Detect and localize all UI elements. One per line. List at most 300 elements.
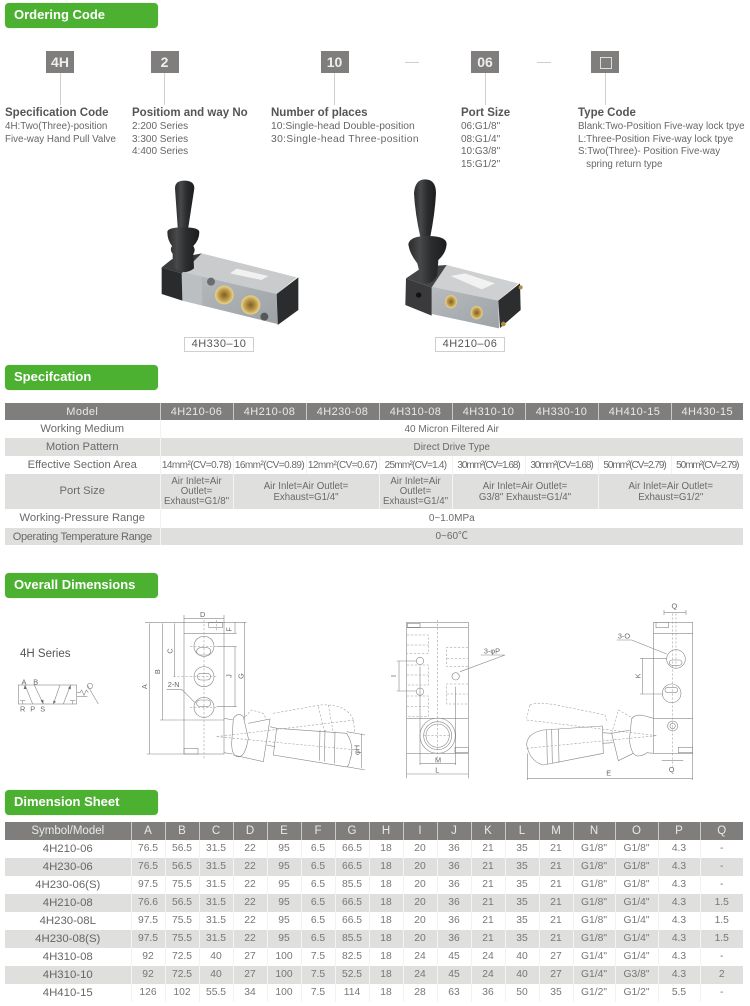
dimension table: 27	[244, 951, 256, 962]
photo: valve 4H330-10	[162, 181, 298, 325]
dimension table: 22	[244, 861, 256, 872]
drawing: side view	[389, 620, 505, 778]
dimension table: 102	[173, 987, 191, 998]
dimension table: 66.5	[342, 861, 362, 872]
photo: valve 4H210-06	[405, 179, 523, 328]
dimension table: M	[551, 825, 561, 837]
dimension table: Symbol/Model	[31, 825, 104, 837]
specification table: Exhaust=G1/4"	[383, 496, 448, 507]
dimension table: 4H210-06	[43, 843, 93, 855]
specification table: Port Size	[60, 485, 105, 497]
panel: product photos	[162, 179, 523, 352]
dimension table: -	[720, 843, 723, 854]
dimension table: 92	[142, 951, 154, 962]
code column: specification code: Five-way Hand Pull Valve	[5, 134, 116, 144]
dimension table: 40	[516, 951, 528, 962]
caption: 4H330-10	[184, 337, 254, 352]
drawing: rear view with handle: K	[633, 673, 642, 678]
dimension table: 20	[414, 879, 426, 890]
heading: dimension sheet	[5, 790, 158, 815]
dimension table: 7.5	[311, 987, 325, 998]
code column: type code: spring return type	[586, 158, 662, 170]
code column: port size: 06:G1/8"	[461, 121, 500, 132]
dimension table: 4H230-08L	[40, 915, 96, 927]
drawing: side view: M	[435, 756, 441, 765]
dimension table: 40	[210, 951, 222, 962]
dimension table: 18	[380, 951, 392, 962]
dimension table: 31.5	[206, 843, 226, 854]
dimension table: 21	[550, 861, 562, 872]
dimension table: 4H230-06	[43, 861, 93, 873]
dimension table: 4H210-08	[43, 897, 93, 909]
pneumatic symbol: B	[33, 677, 38, 686]
drawing: front view with handle: A	[140, 684, 149, 689]
drawing: front view with handle: D	[200, 610, 205, 619]
dimension table: 36	[448, 915, 460, 926]
dimension table: 4.3	[672, 843, 686, 854]
dimension table: 21	[550, 897, 562, 908]
code column: type code	[578, 51, 745, 170]
caption: 4H210-06	[435, 337, 505, 352]
drawing: front view with handle: C	[165, 648, 174, 654]
specification table	[5, 403, 743, 545]
code column: type code: S:Two(Three)- Position Five-way	[578, 146, 720, 157]
dimension table: 4H310-10	[43, 969, 93, 981]
code column: specification code	[5, 51, 116, 144]
dimension table: 21	[482, 915, 494, 926]
dimension table: 100	[275, 951, 293, 962]
drawing: front view with handle: F	[224, 627, 233, 632]
dimension table: 31.5	[206, 861, 226, 872]
dimension table: 6.5	[311, 897, 325, 908]
dimension table: 18	[380, 915, 392, 926]
dimension table: 21	[482, 897, 494, 908]
code column: position and way number	[132, 51, 248, 157]
dimension table: 95	[278, 843, 290, 854]
specification table: G3/8" Exhaust=G1/4"	[479, 492, 571, 503]
specification table: 50mm²(CV=2.79)	[603, 460, 666, 470]
dimension table: 95	[278, 897, 290, 908]
specification table: 4H410-15	[609, 406, 660, 418]
specification table: 40 Micron Filtered Air	[404, 424, 499, 434]
code column: port size: 06	[477, 54, 493, 70]
heading: overall dimensions	[5, 573, 158, 598]
dimension table: 18	[380, 861, 392, 872]
code column: position and way number: Positiom and way No	[132, 107, 248, 119]
code column: position and way number: 2:200 Series	[132, 121, 188, 132]
dimension table: 21	[482, 843, 494, 854]
code column: type code: Blank:Two-Position Five-way lock tpye	[578, 121, 745, 132]
dimension table: 22	[244, 879, 256, 890]
dimension table: 24	[414, 951, 426, 962]
code column: number of places	[271, 51, 419, 144]
dimension table: 7.5	[311, 951, 325, 962]
panel: overall dimensions	[4, 572, 693, 780]
dimension table: 22	[244, 843, 256, 854]
dimension table: 36	[448, 933, 460, 944]
dimension table: 1.5	[715, 933, 729, 944]
drawing: front view with handle: 2-N	[168, 680, 180, 689]
specification table: Effective Section Area	[28, 459, 137, 471]
specification table: 4H310-08	[390, 406, 441, 418]
code column: specification code: 4H:Two(Three)-position	[5, 121, 107, 132]
dimension table: 27	[550, 969, 562, 980]
dimension table: 36	[448, 843, 460, 854]
dimension table: 1.5	[715, 915, 729, 926]
separator dash	[537, 62, 551, 63]
separator dash	[405, 62, 419, 63]
dimension table: 31.5	[206, 897, 226, 908]
dimension table: 18	[380, 879, 392, 890]
specification table: 25mm²(CV=1.4)	[385, 460, 446, 470]
heading: dimension sheet: Dimension Sheet	[14, 794, 119, 809]
dimension table: 21	[550, 915, 562, 926]
drawing: front view with handle: B	[153, 669, 162, 674]
specification table: Exhaust=G1/2"	[638, 492, 703, 503]
specification table: 4H310-10	[463, 406, 514, 418]
code column: number of places: 10:Single-head Double-position	[271, 121, 415, 132]
dimension table: F	[314, 825, 322, 837]
dimension table: K	[484, 825, 492, 837]
specification table: 30mm²(CV=1.68)	[457, 460, 520, 470]
dimension table: 35	[516, 897, 528, 908]
specification table: 4H330-10	[536, 406, 587, 418]
specification table: Exhaust=G1/8"	[164, 496, 229, 507]
dimension table: 21	[482, 861, 494, 872]
dimension table: 40	[516, 969, 528, 980]
drawing: rear view with handle: Q	[669, 765, 675, 774]
dimension table: E	[280, 825, 288, 837]
dimension table: 36	[448, 879, 460, 890]
dimension table: J	[451, 825, 457, 837]
specification table: Exhaust=G1/4"	[273, 492, 339, 503]
dimension table: G1/8"	[581, 933, 607, 944]
heading: specification	[5, 365, 158, 390]
pneumatic symbol	[18, 677, 98, 713]
dimension table: -	[720, 951, 723, 962]
dimension table: 20	[414, 933, 426, 944]
dimension table: 35	[516, 879, 528, 890]
dimension table: 31.5	[206, 915, 226, 926]
specification table: 14mm²(CV=0.78)	[162, 460, 231, 470]
code column: type code: Type Code	[578, 107, 636, 119]
dimension table: 4H410-15	[43, 987, 93, 999]
dimension table: 24	[482, 951, 494, 962]
dimension table: 4.3	[672, 915, 686, 926]
drawing: side view: I	[389, 675, 398, 677]
dimension table: 18	[380, 969, 392, 980]
drawing: front view with handle: G	[236, 673, 245, 679]
dimension table: G1/8"	[581, 897, 607, 908]
code column: number of places: 30:Single-head Three-position	[271, 134, 419, 144]
dimension table: 27	[550, 951, 562, 962]
specification table: Air Inlet=Air Outlet=	[628, 481, 713, 492]
dimension table: G1/4"	[624, 951, 649, 962]
dimension table: 1.5	[715, 897, 729, 908]
specification table: Model	[66, 406, 98, 418]
code column: position and way number: 3:300 Series	[132, 134, 188, 144]
drawing: rear view with handle	[527, 601, 693, 780]
dimension table: 95	[278, 861, 290, 872]
dimension table: G1/8"	[624, 879, 649, 890]
code column: port size	[461, 51, 510, 170]
code column: port size: 10:G3/8"	[461, 146, 500, 157]
dimension table: 63	[448, 987, 460, 998]
dimension table: 22	[244, 933, 256, 944]
dimension table: 56.5	[172, 843, 192, 854]
dimension table: 85.5	[342, 933, 362, 944]
dimension table: 21	[550, 933, 562, 944]
dimension table: 21	[550, 843, 562, 854]
dimension table: O	[632, 825, 641, 837]
dimension table: G1/4"	[581, 951, 607, 962]
specification table: Working-Pressure Range	[20, 512, 145, 524]
code column: number of places: 10	[327, 54, 342, 70]
dimension table: G1/8"	[581, 879, 607, 890]
dimension table: 85.5	[342, 879, 362, 890]
dimension table: 18	[380, 987, 392, 998]
drawing: front view with handle: J	[225, 674, 234, 678]
dimension table: D	[246, 825, 254, 837]
dimension table: 18	[380, 933, 392, 944]
dimension table: 35	[516, 915, 528, 926]
dimension table: G1/4"	[624, 915, 649, 926]
dimension table: 4.3	[672, 969, 686, 980]
specification table: Air Inlet=Air Outlet=	[264, 481, 348, 492]
code column: position and way number: 2	[161, 54, 168, 70]
dimension table: 72.5	[172, 969, 192, 980]
dimension table: G1/8"	[581, 861, 607, 872]
dimension table: G1/8"	[624, 861, 649, 872]
dimension table: 75.5	[172, 915, 192, 926]
specification table: 0~60℃	[435, 531, 468, 542]
specification table: 16mm²(CV=0.89)	[235, 460, 304, 470]
specification table: 4H230-08	[317, 406, 368, 418]
panel: specification	[4, 364, 743, 545]
dimension table: 76.5	[138, 861, 158, 872]
drawing: front view with handle	[140, 610, 365, 770]
pneumatic symbol: P	[30, 704, 35, 713]
dimension table: 4H310-08	[43, 951, 93, 963]
dimension table	[5, 822, 743, 1002]
dimension table: G1/4"	[624, 933, 649, 944]
dimension table: 36	[482, 987, 494, 998]
pneumatic symbol: S	[40, 704, 45, 713]
dimension table: 97.5	[138, 915, 158, 926]
drawing: side view: 3-φP	[484, 647, 500, 656]
dimension table: G1/8"	[581, 843, 607, 854]
dimension table: 18	[380, 843, 392, 854]
specification table: 50mm²(CV=2.79)	[676, 460, 738, 470]
dimension table: B	[178, 825, 186, 837]
code column: number of places: Number of places	[271, 107, 368, 119]
specification table: Air Inlet=Air Outlet=	[483, 481, 567, 492]
dimension table: G1/8"	[581, 915, 607, 926]
dimension table: 55.5	[206, 987, 226, 998]
code column: specification code: Specification Code	[5, 107, 109, 119]
dimension table: G1/8"	[624, 843, 649, 854]
specification table: 0~1.0MPa	[429, 513, 475, 524]
dimension table: 18	[380, 897, 392, 908]
dimension table: 7.5	[311, 969, 325, 980]
dimension table: 20	[414, 843, 426, 854]
dimension table: 4.3	[672, 951, 686, 962]
dimension table: 66.5	[342, 915, 362, 926]
dimension table: I	[418, 825, 422, 837]
dimension table: 21	[550, 879, 562, 890]
specification table: Air Inlet=Air	[390, 476, 441, 487]
dimension table: G1/4"	[624, 897, 649, 908]
dimension table: 6.5	[311, 861, 325, 872]
caption: 4H330-10: 4H330–10	[192, 338, 246, 350]
dimension table: 4.3	[672, 933, 686, 944]
dimension table: 45	[448, 969, 460, 980]
dimension table: G3/8"	[624, 969, 649, 980]
dimension table: 95	[278, 915, 290, 926]
dimension table: 92	[142, 969, 154, 980]
drawing: rear view with handle: Q	[671, 601, 677, 610]
dimension table: 97.5	[138, 879, 158, 890]
specification table: Direct Drive Type	[413, 442, 490, 452]
dimension table: 6.5	[311, 843, 325, 854]
dimension drawings svg	[18, 601, 693, 780]
dimension table: 52.5	[342, 969, 362, 980]
dimension table: G1/2"	[624, 987, 649, 998]
dimension table: 22	[244, 915, 256, 926]
dimension table: C	[212, 825, 220, 837]
dimension table: 35	[516, 843, 528, 854]
specification table: Operating Temperature Range	[13, 530, 152, 542]
dimension table: 72.5	[172, 951, 192, 962]
dimension table: 4H230-06(S)	[35, 879, 100, 891]
code column: type code: L:Three-Position Five-way lock tpye	[578, 134, 733, 144]
dimension table: 36	[448, 861, 460, 872]
dimension table: 35	[550, 987, 562, 998]
pneumatic symbol: A	[22, 677, 27, 686]
dimension table: Q	[717, 825, 726, 837]
pneumatic symbol: R	[20, 704, 25, 713]
heading: specification: Specifcation	[14, 369, 91, 384]
product photos svg	[162, 179, 523, 328]
dimension table: 95	[278, 933, 290, 944]
specification table: Motion Pattern	[46, 441, 119, 453]
heading: ordering code: Ordering Code	[14, 7, 105, 22]
dimension table: 31.5	[206, 879, 226, 890]
code column: port size: 08:G1/4"	[461, 134, 500, 144]
dimension table: 22	[244, 897, 256, 908]
dimension table: 97.5	[138, 933, 158, 944]
dimension table: 5.5	[672, 987, 686, 998]
drawing: rear view with handle: E	[606, 768, 611, 777]
panel: ordering code	[4, 2, 745, 170]
specification table: 4H430-15	[681, 406, 733, 418]
label: 4H series: 4H Series	[20, 648, 70, 660]
drawing: side view: L	[435, 765, 439, 774]
drawing: front view with handle: φH	[353, 745, 362, 755]
dimension table: 34	[244, 987, 256, 998]
dimension table: 75.5	[172, 933, 192, 944]
dimension table: -	[720, 861, 723, 872]
dimension table: 45	[448, 951, 460, 962]
dimension table: L	[519, 825, 525, 837]
dimension table: A	[144, 825, 152, 837]
specification table: Outlet=	[400, 486, 431, 497]
dimension table: 76.6	[138, 897, 158, 908]
specification table: Air Inlet=Air	[171, 476, 222, 487]
dimension table: 24	[482, 969, 494, 980]
dimension table: 20	[414, 915, 426, 926]
dimension table: G	[348, 825, 356, 837]
dimension table: -	[720, 987, 723, 998]
specification table: Outlet=	[181, 486, 212, 497]
dimension table: 40	[210, 969, 222, 980]
dimension table: 35	[516, 861, 528, 872]
dimension table: 21	[482, 879, 494, 890]
dimension table: 6.5	[311, 915, 325, 926]
specification table: 30mm²(CV=1.68)	[530, 460, 593, 470]
heading: overall dimensions: Overall Dimensions	[14, 577, 135, 592]
dimension table: 126	[139, 987, 157, 998]
specification table: 4H210-06	[171, 406, 222, 418]
dimension table: 21	[482, 933, 494, 944]
dimension table: 75.5	[172, 879, 192, 890]
dimension table: 24	[414, 969, 426, 980]
dimension table: 4H230-08(S)	[35, 933, 100, 945]
dimension table: G1/4"	[581, 969, 607, 980]
dimension table: 28	[414, 987, 426, 998]
code column: port size: 15:G1/2"	[461, 158, 500, 170]
dimension table: P	[675, 825, 683, 837]
dimension table: 4.3	[672, 879, 686, 890]
dimension table: 20	[414, 897, 426, 908]
dimension table: N	[590, 825, 598, 837]
dimension table: 27	[244, 969, 256, 980]
dimension table: 100	[275, 969, 293, 980]
dimension table: 114	[344, 987, 360, 998]
dimension table: 50	[516, 987, 528, 998]
dimension table: 56.5	[172, 897, 192, 908]
dimension table: G1/2"	[581, 987, 607, 998]
dimension table: H	[382, 825, 390, 837]
specification table: 4H210-08	[244, 406, 295, 418]
dimension table: 20	[414, 861, 426, 872]
dimension table: 6.5	[311, 933, 325, 944]
dimension table: 66.5	[342, 897, 362, 908]
dimension table: 56.5	[172, 861, 192, 872]
dimension table: 2	[719, 969, 725, 980]
dimension table: 36	[448, 897, 460, 908]
dimension table: 82.5	[342, 951, 362, 962]
dimension table: 76.5	[138, 843, 158, 854]
dimension table: 6.5	[311, 879, 325, 890]
heading: ordering code	[5, 3, 158, 28]
specification table: Working Medium	[40, 423, 124, 435]
code column: position and way number: 4:400 Series	[132, 146, 188, 157]
dimension table: 66.5	[342, 843, 362, 854]
drawing: rear view with handle: 3-O	[618, 632, 630, 641]
dimension table: 35	[516, 933, 528, 944]
code column: port size: Port Size	[461, 107, 510, 119]
dimension table: 4.3	[672, 897, 686, 908]
caption: 4H210-06: 4H210–06	[443, 338, 497, 350]
dimension table: 4.3	[672, 861, 686, 872]
dimension table: 100	[275, 987, 293, 998]
dimension table: 31.5	[206, 933, 226, 944]
specification table: 12mm²(CV=0.67)	[308, 460, 377, 470]
dimension table: 95	[278, 879, 290, 890]
dimension table: -	[720, 879, 723, 890]
panel: dimension sheet	[4, 790, 743, 1002]
